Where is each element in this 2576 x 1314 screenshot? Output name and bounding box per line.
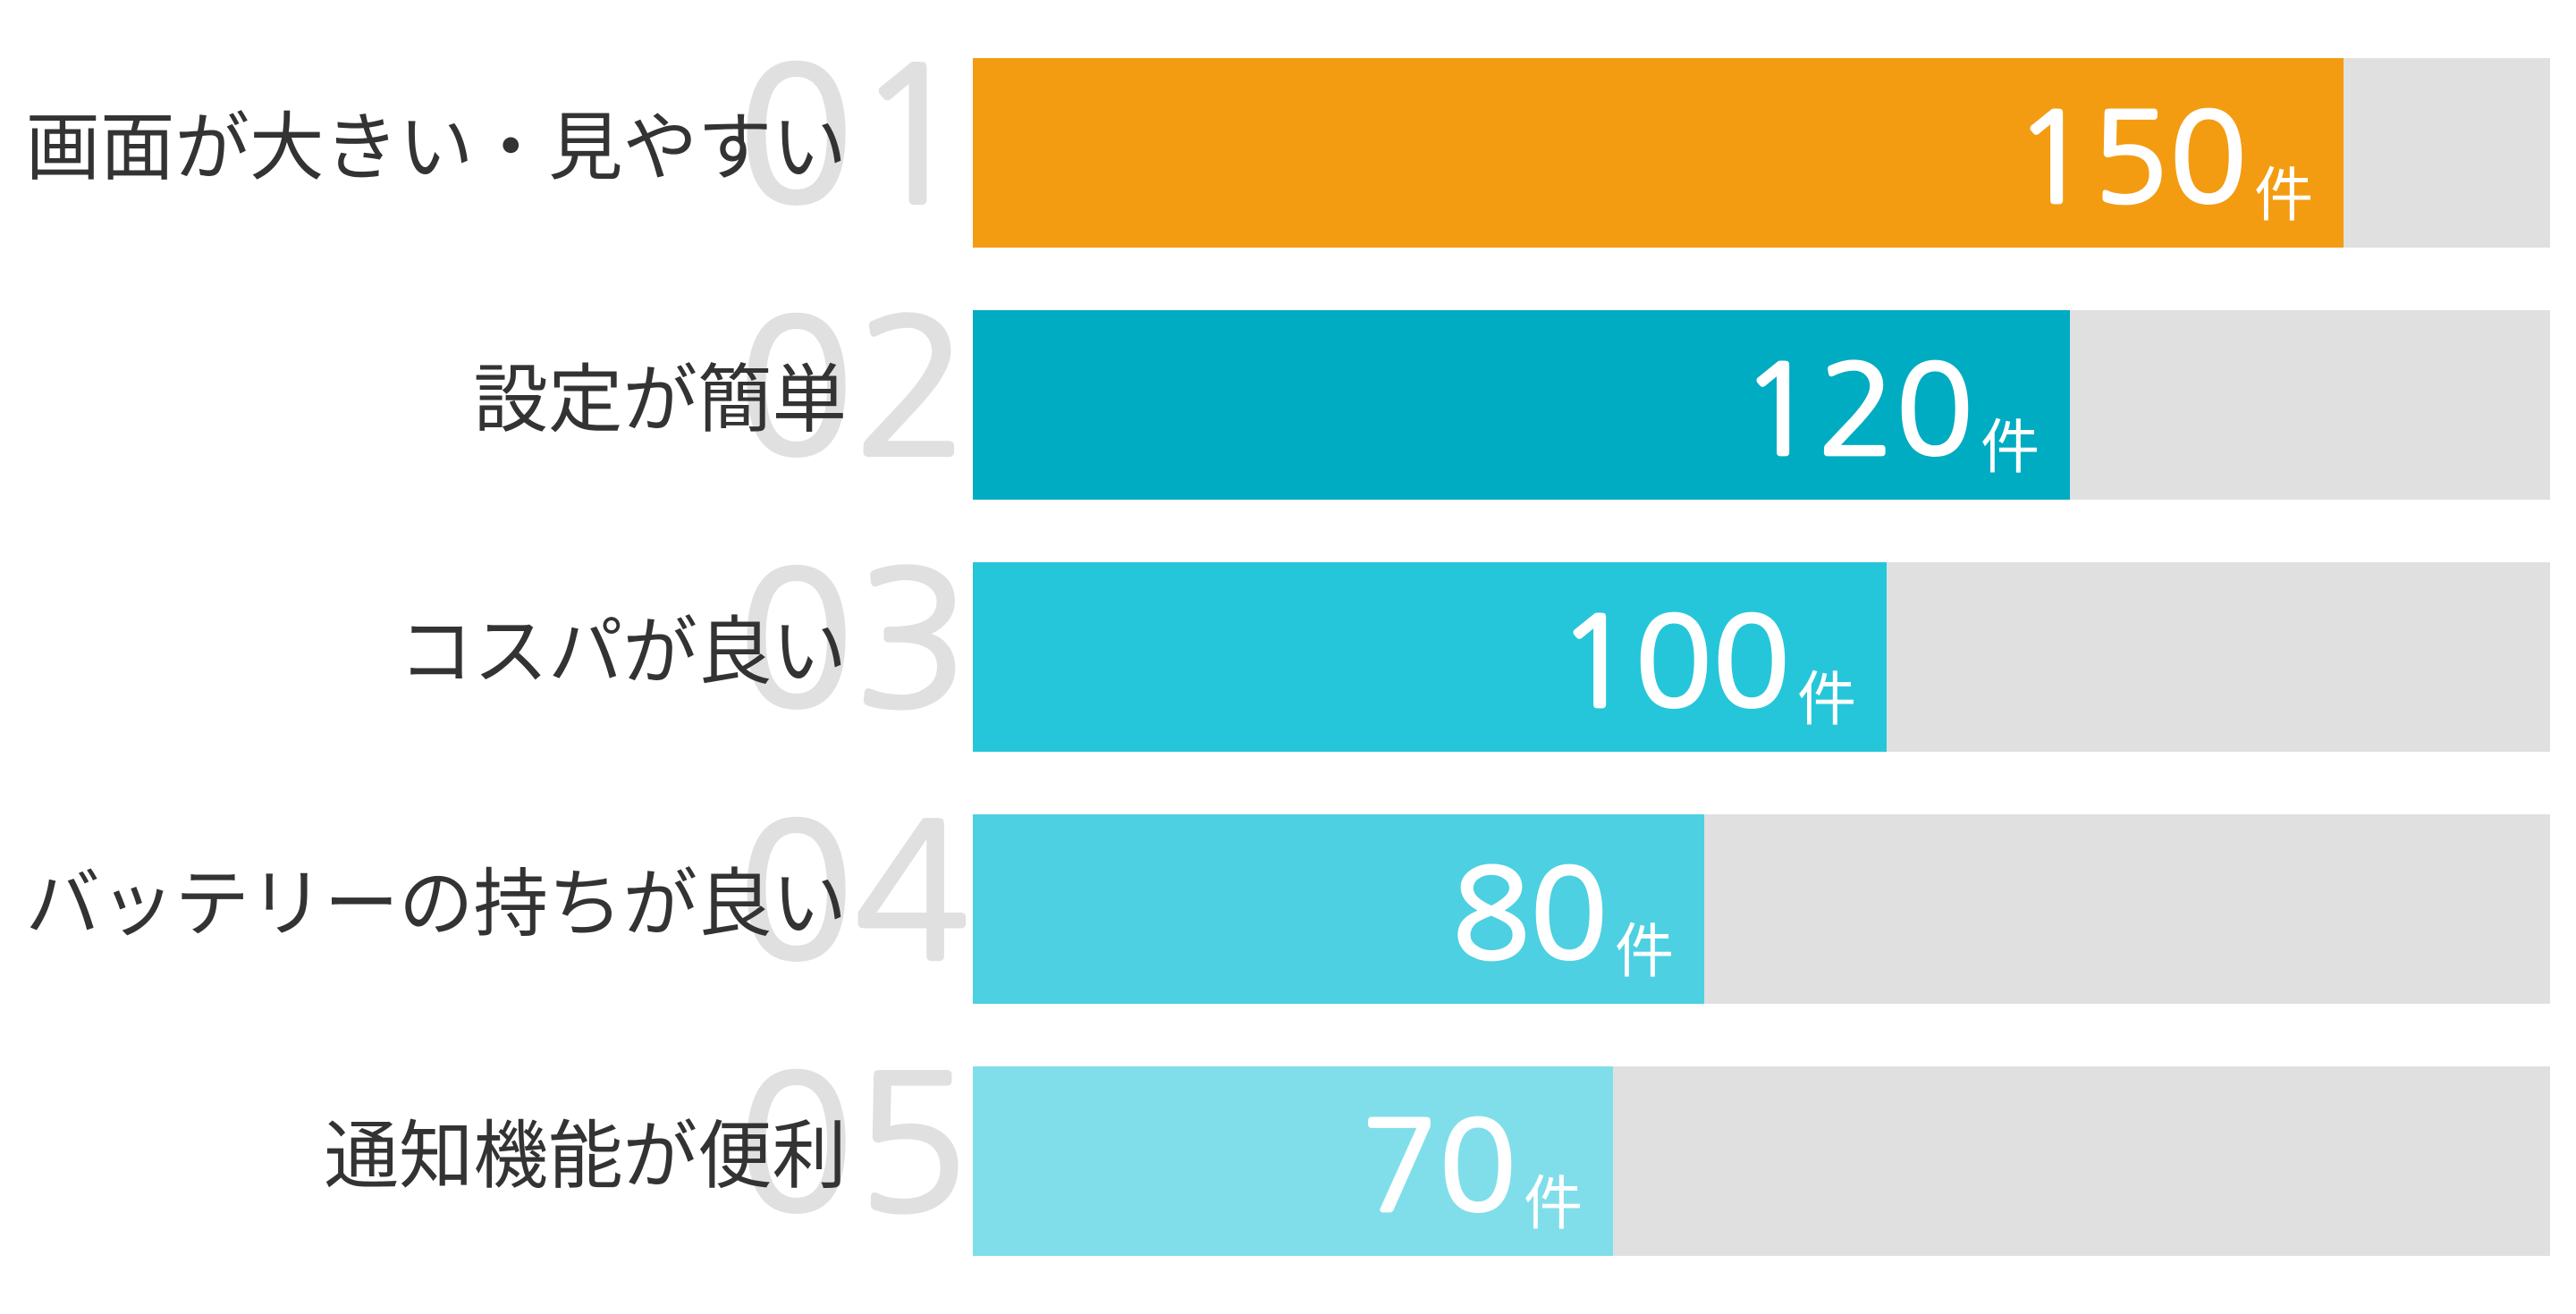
value 80件: 件: [1615, 918, 1674, 984]
bar value 80: [973, 814, 1704, 1004]
label 1: 画面が大きい・見やすい: [25, 105, 847, 190]
value 70件: 70: [1361, 1105, 1516, 1229]
label 4: バッテリーの持ちが良い: [25, 862, 847, 946]
value 80件: [1452, 853, 1674, 984]
value 70件: 件: [1524, 1170, 1583, 1236]
bar track 1: [973, 58, 2550, 248]
bar track 2: [973, 310, 2550, 500]
value 120件: 120: [1740, 349, 1973, 473]
bar value 70: [973, 1066, 1613, 1256]
bar track 5: [973, 1066, 2550, 1256]
bar track 3: [973, 562, 2550, 752]
row 1: 画面が大きい・見やすい: [25, 44, 2550, 248]
value 70件: [1361, 1105, 1583, 1236]
value 80件: 80: [1452, 853, 1608, 977]
row 2: 設定が簡単: [474, 296, 2550, 500]
rank number 02: 02: [738, 296, 970, 482]
bar value 120: [973, 310, 2070, 500]
value 100件: 100: [1557, 601, 1790, 725]
bar value 150: [973, 58, 2344, 248]
value 100件: 件: [1797, 666, 1856, 732]
rank number 05: 05: [738, 1052, 970, 1238]
rank number 03: 03: [738, 548, 970, 734]
row 4: バッテリーの持ちが良い: [25, 800, 2550, 1004]
label 5: 通知機能が便利: [324, 1114, 847, 1198]
value 120件: 件: [1981, 414, 2040, 480]
row 3: コスパが良い: [399, 548, 2550, 752]
value 150件: 150: [2014, 97, 2247, 221]
label 3: コスパが良い: [399, 610, 847, 694]
row 5: 通知機能が便利: [324, 1052, 2550, 1256]
bar track 4: [973, 814, 2550, 1004]
rank number 04: 04: [738, 800, 970, 986]
rank number 01: 01: [738, 44, 970, 230]
value 150件: 件: [2254, 162, 2313, 228]
label 2: 設定が簡単: [474, 358, 847, 442]
bar value 100: [973, 562, 1887, 752]
